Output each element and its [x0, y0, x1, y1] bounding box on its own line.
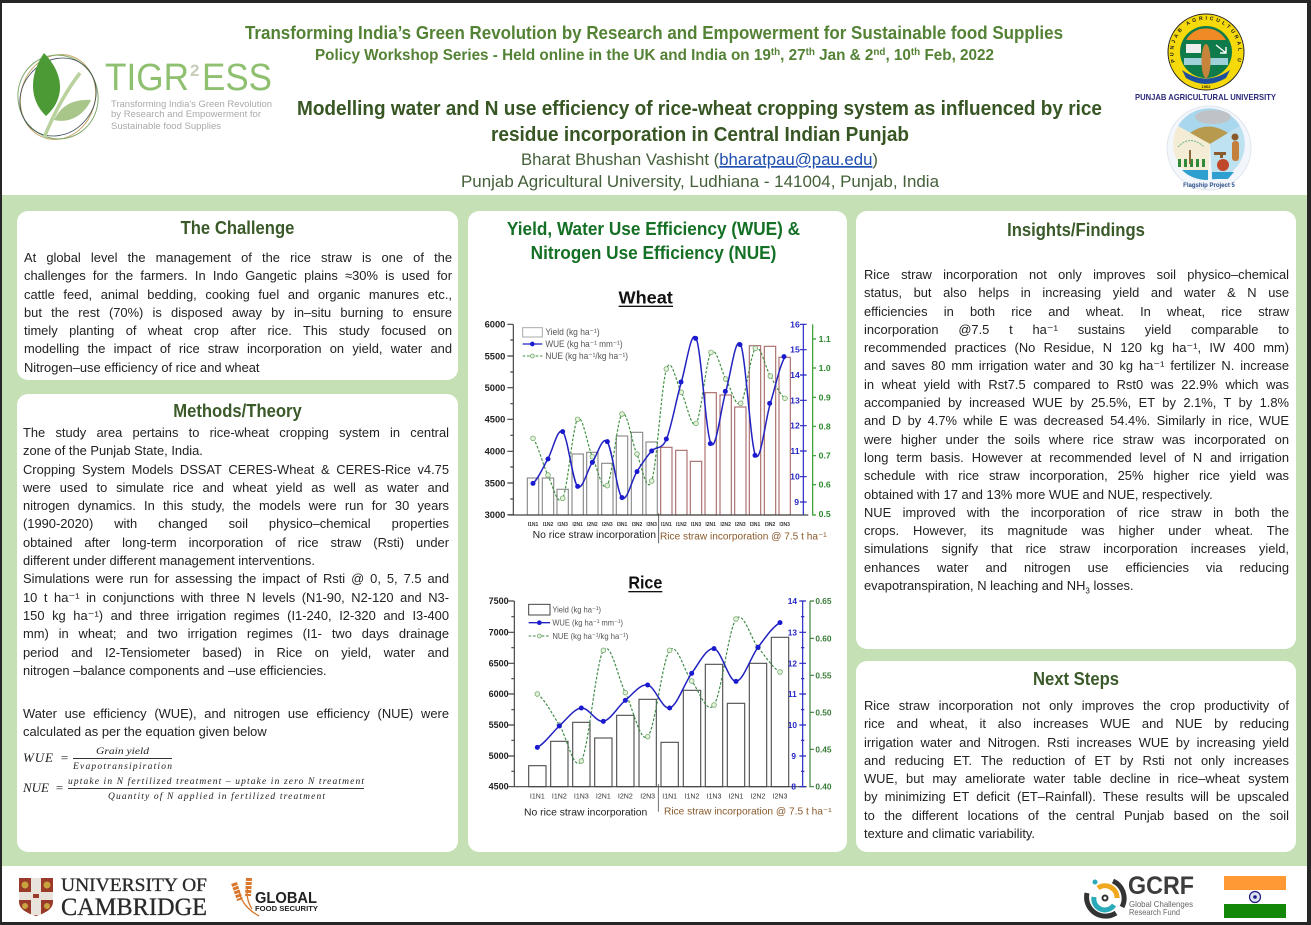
chart: Rice	[488, 573, 832, 819]
left axis labels: 5500	[489, 720, 509, 730]
yield bars	[529, 637, 789, 787]
text block: methods: The study area pertains to rice-wheat cropping system in central	[23, 425, 449, 440]
left axis labels: 3000	[485, 510, 505, 520]
icon: GCRF rings	[1087, 880, 1124, 916]
text block: methods: 10 t ha⁻¹ in conjunctions with three N levels (N1-90, N2-120 and N3-	[23, 590, 449, 605]
text block: efficiency intro: calculated as per the equation given below	[23, 724, 267, 739]
panel: The Challenge	[17, 211, 458, 380]
text block: methods: nitrogen –balance components and –use efficiencies.	[23, 663, 327, 678]
panel: Next Steps	[856, 661, 1296, 852]
panel: yield and efficiency charts	[468, 211, 847, 852]
legend: NUE (kg ha⁻¹/kg ha⁻¹)	[552, 631, 628, 641]
axes	[508, 601, 814, 787]
icon: flagship project badge: Flagship Project 5	[1183, 183, 1235, 189]
WUE curve	[530, 336, 786, 500]
legend: Yield (kg ha⁻¹)	[545, 327, 600, 337]
heading: Yield, WUE and NUE	[507, 218, 800, 263]
text block: challenge: modelling the impact of rice straw incorporation on yield, water and	[24, 341, 452, 356]
blue axis labels: 14	[790, 370, 800, 380]
x axis labels: I2N3	[602, 522, 613, 528]
x axis labels: I2N1	[705, 522, 716, 528]
GCRF wordmark	[1128, 872, 1194, 917]
axes	[507, 324, 816, 515]
University of Cambridge wordmark	[61, 875, 207, 921]
text block: findings: obtained with 17 and 13% more WUE and NUE, respectively.	[864, 487, 1213, 502]
x axis labels: I1N1	[662, 794, 677, 801]
blue axis labels: 10	[788, 720, 797, 730]
equation: NUE: NUE	[22, 780, 49, 795]
left axis labels: 7500	[489, 596, 509, 606]
text block: methods: were used to simulate rice and wheat yield as well as water and	[23, 480, 449, 495]
legend: NUE (kg ha⁻¹/kg ha⁻¹)	[545, 351, 628, 361]
panel: Insights/Findings	[856, 211, 1296, 649]
TIGR2ESS wordmark: Transforming India's Green Revolution	[111, 99, 272, 110]
x axis labels: I2N1	[572, 522, 583, 528]
green axis labels: 1.0	[819, 363, 831, 373]
text block: findings: evapotranspiration, N leaching and NH3 losses.	[864, 578, 1134, 596]
left axis labels: 4000	[485, 447, 505, 457]
green axis labels: 0.5	[819, 509, 831, 519]
equation: WUE: Grain yield	[96, 747, 149, 757]
green axis labels: 0.60	[815, 633, 832, 643]
x axis labels: I1N2	[685, 794, 699, 801]
text block: methods: period and I2-Tensiometer based) in Rice on yield, water and	[23, 645, 449, 660]
text block: findings: simulations signify that rice straw incorporation increases yield,	[864, 541, 1289, 556]
left axis labels: 5000	[485, 383, 505, 393]
text block: findings: and saves 80 mm irrigation water and 30 kg ha⁻¹ fertilizer N. increase	[864, 358, 1289, 373]
icon: wheat ears	[234, 878, 259, 916]
Global Food Security wordmark: FOOD SECURITY	[255, 904, 318, 913]
footer band	[2, 866, 1307, 922]
heading: Methods/Theory: Methods/Theory	[173, 400, 302, 421]
green axis labels: 0.40	[815, 782, 832, 792]
equations	[22, 747, 364, 802]
equation: WUE	[23, 747, 172, 772]
legend: WUE (kg ha⁻¹ mm⁻¹)	[552, 618, 623, 628]
text block: challenge	[24, 250, 452, 375]
green axis labels: 0.9	[819, 392, 831, 402]
text block: methods: zone of the Punjab State, India.	[23, 443, 203, 458]
blue axis labels: 13	[790, 395, 800, 405]
workshop series line: th	[806, 47, 815, 58]
blue axis labels: 10	[790, 472, 800, 482]
text block: methods: mm) in wheat; and two irrigation regimes (I1- two days drainage	[23, 626, 449, 641]
header text and logos	[17, 14, 1276, 191]
green axis labels: 0.50	[815, 707, 832, 717]
university name: PUNJAB AGRICULTURAL UNIVERSITY	[1135, 92, 1276, 102]
text block: efficiency intro	[23, 706, 449, 739]
text block: findings: and D by 4.7% while E was decreased 54.4%. Similarly in rice, WUE	[864, 413, 1289, 428]
text block: findings: enhances water and nitrogen use efficiencies via reducing	[864, 560, 1289, 575]
text block: methods: (1990-2020) with changed soil physico–chemical properties	[23, 516, 449, 531]
icon: University of Cambridge shield	[19, 878, 53, 916]
icon: TIGR2ESS leaf logo	[4, 42, 112, 152]
x axis labels: I2N1	[596, 794, 611, 801]
green axis labels: 1.1	[819, 334, 831, 344]
heading: Insights/Findings: Insights/Findings	[1007, 219, 1145, 240]
x axis labels: I3N3	[779, 522, 790, 528]
caption: straw: Rice straw incorporation @ 7.5 t ha⁻¹	[664, 807, 832, 818]
footer logos	[19, 872, 1286, 921]
x axis labels: I3N1	[617, 522, 627, 528]
legend: WUE (kg ha⁻¹ mm⁻¹)	[545, 339, 623, 349]
text block: findings: schedule with rice straw incorporation, 25% higher rice yield was	[864, 468, 1289, 483]
left axis labels: 6000	[485, 320, 505, 330]
x axis labels: I3N2	[632, 522, 642, 528]
x axis labels: I2N3	[640, 794, 655, 801]
text block: next steps	[864, 698, 1289, 841]
x axis labels	[530, 794, 787, 801]
heading: Rice: Rice	[628, 573, 662, 593]
text block: challenge: but the rest (70%) is disposed away by in–situ burning to ensure	[24, 305, 452, 320]
green axis labels: 0.6	[819, 480, 831, 490]
green content background	[2, 195, 1307, 866]
green axis labels: 0.7	[819, 451, 831, 461]
legend	[523, 327, 628, 361]
x axis labels: I1N2	[676, 522, 687, 528]
poster title	[297, 97, 1102, 146]
Global Food Security wordmark: GLOBAL	[255, 890, 317, 907]
NUE curve	[531, 346, 787, 501]
x axis labels	[528, 522, 790, 528]
icon: flag of India	[1224, 876, 1286, 918]
text block: challenge: Nitrogen–use efficiency of rice and wheat	[24, 360, 260, 375]
equation: NUE	[22, 776, 364, 802]
workshop series line: Feb, 2022	[920, 47, 994, 64]
TIGR2ESS wordmark	[105, 57, 272, 132]
left axis labels	[485, 320, 505, 520]
blue axis labels: 12	[790, 421, 800, 431]
green axis labels: 0.55	[815, 670, 832, 680]
left axis labels: 4500	[485, 415, 505, 425]
equation: WUE: Evapotransipiration	[72, 762, 172, 772]
yield bars	[527, 346, 790, 515]
text block: methods: Simulations were run for assessing the impact of Rsti @ 0, 5, 7.5 and	[23, 571, 449, 586]
caption: straw: Rice straw incorporation @ 7.5 t ha⁻¹	[660, 532, 827, 543]
icon: flagship project badge	[1167, 106, 1251, 190]
left axis labels: 6500	[489, 658, 509, 668]
text block: challenge: At global level the management of the rice straw is one of the	[24, 250, 452, 265]
x axis labels: I2N1	[729, 794, 743, 801]
text block: next steps: WUE, but may ameliorate water table decline in rice–wheat system	[864, 771, 1289, 786]
text block: methods: Cropping System Models DSSAT CERES-Wheat & CERES-Rice v4.75	[23, 462, 449, 477]
text block: findings: incorporation @7.5 t ha⁻¹ sustains yield comparable to	[864, 322, 1289, 337]
heading: Wheat: Wheat	[618, 287, 673, 307]
TIGR2ESS wordmark: by Research and Empowerment for	[111, 109, 262, 120]
equation: WUE: WUE	[23, 750, 53, 765]
GCRF wordmark: Global Challenges	[1129, 899, 1193, 909]
x axis labels: I1N1	[528, 522, 538, 528]
text block: methods: obtained after long-term incorporation of rice straw (Rsti) under	[23, 535, 449, 550]
left axis labels: 4500	[489, 782, 509, 792]
blue axis labels	[788, 596, 797, 792]
University of Cambridge wordmark: CAMBRIDGE	[61, 894, 207, 921]
heading: Yield, WUE and NUE: Yield, Water Use Efficiency (WUE) &	[507, 218, 800, 239]
text block: findings: were higher under the soils where rice straw was incorporated on	[864, 432, 1289, 447]
text block: findings: NUE improved with the incorporation of rice straw in both the	[864, 505, 1289, 520]
equation: NUE: Quantity of N applied in fertilized treatment	[108, 791, 325, 802]
text block: methods: different under different management interventions.	[23, 553, 315, 568]
GCRF wordmark: GCRF	[1128, 872, 1194, 900]
left axis labels: 5500	[485, 351, 505, 361]
text block: challenge: timely planting of wheat crop after rice. This study focused on	[24, 323, 452, 338]
text block: next steps: Rice straw incorporation not only improves the crop productivity of	[864, 698, 1289, 713]
NUE curve	[535, 617, 782, 763]
workshop title: Transforming India’s Green Revolution by Research and Empowerment for Sustainable food Supplies	[245, 22, 1063, 43]
blue axis labels: 12	[788, 658, 797, 668]
header band	[2, 3, 1307, 195]
x axis labels: I1N2	[552, 794, 567, 801]
equation: NUE: =	[55, 780, 64, 795]
blue axis labels: 9	[794, 497, 799, 507]
blue axis labels	[790, 319, 800, 507]
TIGR2ESS wordmark: Sustainable food Supplies	[111, 121, 221, 132]
blue axis labels: 15	[790, 345, 800, 355]
x axis labels: I2N2	[587, 522, 598, 528]
heading: Yield, WUE and NUE: Nitrogen Use Efficiency (NUE)	[531, 242, 776, 263]
text block: findings: crops. However, its magnitude was higher under wheat. The	[864, 523, 1289, 538]
workshop series line: th	[771, 47, 780, 58]
left axis labels: 5000	[489, 751, 509, 761]
x axis labels: I3N2	[765, 522, 775, 528]
group separator	[657, 784, 660, 812]
green axis labels	[819, 334, 831, 519]
text block: methods: nitrogen dynamics. In this study, the models were run for 30 years	[23, 498, 449, 513]
x axis labels: I1N3	[574, 794, 589, 801]
workshop series line: , 10	[885, 47, 911, 64]
text block: findings: recommended practices (No Residue, N 120 kg ha⁻¹, IW 400 mm)	[864, 340, 1289, 355]
x axis labels: I2N2	[720, 522, 731, 528]
text block: next steps: by minimizing ET deficit (ET–Rainfall). These results will be upscaled	[864, 789, 1289, 804]
text block: next steps: and reducing ET. The reduction of ET by Rsti not only increases	[864, 753, 1289, 768]
x axis labels: I3N1	[750, 522, 760, 528]
left axis labels: 6000	[489, 689, 509, 699]
text block: next steps: texture and climatic variability.	[864, 826, 1035, 841]
green axis labels	[815, 596, 832, 792]
green axis labels: 0.8	[819, 421, 831, 431]
blue axis labels: 8	[791, 782, 796, 792]
text block: findings: efficiencies in both rice and wheat. In wheat, rice straw	[864, 304, 1289, 319]
text block: next steps: irrigation water and Nitrogen. Rsti increases WUE by increasing yield	[864, 735, 1289, 750]
blue axis labels: 16	[790, 319, 800, 329]
blue axis labels: 11	[788, 689, 797, 699]
text block: methods: 150 kg ha⁻¹) and three irrigation regimes (I1-240, I2-320 and I3-400	[23, 608, 449, 623]
text block: findings: Rice straw incorporation not only improves soil physico–chemical	[864, 267, 1289, 282]
University of Cambridge wordmark: UNIVERSITY OF	[61, 875, 207, 896]
TIGR2ESS wordmark: TIGR	[105, 57, 189, 99]
text block: findings: long term basis. However at recommended level of N and irrigation	[864, 450, 1289, 465]
x axis labels: I2N3	[773, 794, 787, 801]
x axis labels: I2N2	[618, 794, 633, 801]
workshop series line: th	[911, 47, 920, 58]
text block: methods	[23, 425, 449, 678]
text block: challenge: cattle feed, animal bedding, cooking fuel and organic manures etc.,	[24, 287, 452, 302]
text block: efficiency intro: Water use efficiency (WUE), and nitrogen use efficiency (NUE) were	[23, 706, 449, 721]
workshop series line: , 27	[780, 47, 806, 64]
left axis labels: 3500	[485, 478, 505, 488]
poster title: Modelling water and N use efficiency of rice-wheat cropping system as influenced by rice	[297, 97, 1102, 120]
x axis labels: I1N2	[543, 522, 553, 528]
workshop series line: nd	[873, 47, 885, 58]
blue axis labels: 9	[791, 751, 796, 761]
icon: Punjab Agricultural University seal: 1962	[1202, 84, 1211, 89]
text block: findings: status, but also helps in increasing yield and water & N use	[864, 285, 1289, 300]
equation: WUE: =	[60, 750, 69, 765]
left axis labels: 7000	[489, 627, 509, 637]
equation: NUE: uptake in N fertilized treatment – uptake in zero N treatment	[68, 776, 364, 787]
x axis labels: I1N3	[557, 522, 568, 528]
WUE curve	[535, 620, 782, 750]
workshop series line: Policy Workshop Series - Held online in the UK and India on 19	[315, 47, 778, 64]
x axis labels: I3N3	[646, 522, 657, 528]
x axis labels: I2N2	[751, 794, 765, 801]
workshop series line: Jan & 2	[815, 47, 873, 64]
text block: challenge: challenges for the farmers. In Indo Gangetic plains ≈30% is used for	[24, 268, 452, 283]
green axis labels: 0.65	[815, 596, 832, 606]
author: Bharat Bhushan Vashisht (bharatpau@pau.edu)	[521, 150, 878, 169]
caption: no straw: No rice straw incorporation	[524, 808, 647, 819]
text block: next steps: rice and wheat, it also increases WUE and NUE by reducing	[864, 716, 1289, 731]
heading: The Challenge: The Challenge	[181, 217, 294, 238]
GCRF wordmark: Research Fund	[1129, 907, 1180, 917]
chart: Wheat	[484, 287, 831, 544]
TIGR2ESS wordmark: ESS	[202, 57, 272, 99]
x axis labels: I1N3	[691, 522, 701, 528]
caption: no straw: No rice straw incorporation	[533, 530, 656, 541]
green axis labels: 0.45	[815, 744, 832, 754]
panel: Methods/Theory	[17, 394, 458, 852]
heading: Next Steps: Next Steps	[1033, 668, 1119, 689]
x axis labels: I2N3	[735, 522, 746, 528]
icon: Punjab Agricultural University seal	[1168, 14, 1244, 90]
legend: Yield (kg ha⁻¹)	[552, 604, 601, 614]
affiliation: Punjab Agricultural University, Ludhiana - 141004, Punjab, India	[461, 172, 940, 191]
text block: findings: accompanied by increased WUE by 25.5%, ET by 2.1%, T by 1.8%	[864, 395, 1289, 410]
left axis labels	[489, 596, 509, 792]
group separator	[657, 513, 660, 543]
text block: findings: in wheat yield with Rst7.5 compared to Rst0 was 22.9% which was	[864, 377, 1289, 392]
TIGR2ESS wordmark: 2	[190, 61, 199, 80]
poster title: residue incorporation in Central Indian Punjab	[491, 123, 909, 146]
blue axis labels: 13	[788, 627, 797, 637]
blue axis labels: 11	[790, 446, 800, 456]
x axis labels: I1N1	[661, 522, 672, 528]
blue axis labels: 14	[788, 596, 797, 606]
x axis labels: I1N3	[707, 794, 721, 801]
legend	[529, 604, 628, 641]
x axis labels: I1N1	[530, 794, 545, 801]
text block: next steps: to the different locations of the central Punjab based on the soil	[864, 808, 1289, 823]
text block: findings	[864, 267, 1289, 596]
